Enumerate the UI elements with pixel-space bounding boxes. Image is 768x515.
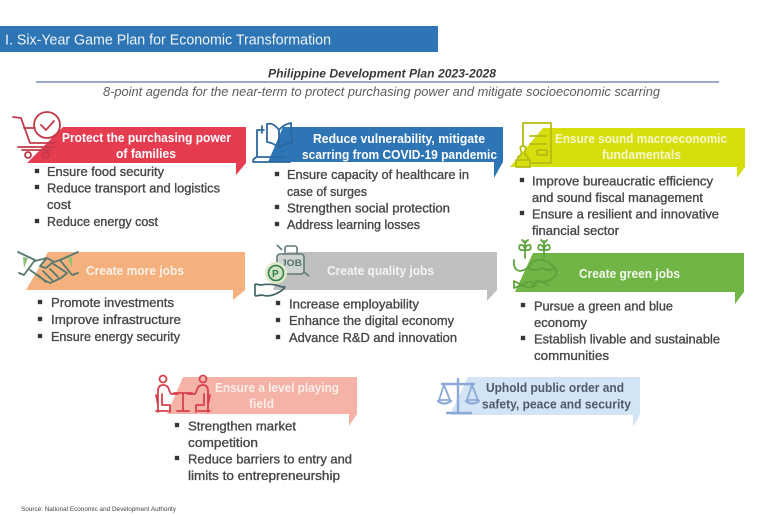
heading <box>555 131 727 162</box>
list <box>276 296 457 345</box>
list: Address learning losses <box>287 217 420 232</box>
subtitle: 8-point agenda for the near-term to protect purchasing power and mitigate socioeconomic scarring <box>103 84 661 99</box>
icon: document with stamp <box>516 123 551 167</box>
list: Ensure food security <box>47 164 164 179</box>
heading: of families <box>116 146 176 161</box>
panel: level playing field <box>156 376 357 483</box>
list: Reduce barriers to entry and <box>188 452 352 466</box>
panel: reduce vulnerability <box>253 123 503 232</box>
heading: Ensure sound macroeconomic <box>555 131 727 146</box>
heading: field <box>249 396 274 411</box>
list <box>175 418 352 483</box>
heading: Create more jobs <box>86 263 184 278</box>
banner: salmon <box>167 377 357 426</box>
icon: plants, whale and fish <box>514 240 556 288</box>
list: Strengthen market <box>188 418 296 434</box>
header bar: I. Six-Year Game Plan for Economic Transformation <box>5 32 331 48</box>
list: Ensure a resilient and innovative <box>532 206 719 222</box>
list <box>35 164 220 229</box>
icon: job case, peso coin and hand <box>255 245 309 296</box>
panel: public order and safety <box>438 377 640 427</box>
heading: fundamentals <box>602 147 681 162</box>
heading: Create quality jobs <box>327 263 434 278</box>
banner: yellow-green <box>510 128 745 178</box>
list: Pursue a green and blue <box>534 298 673 314</box>
panel: sound macroeconomic fundamentals <box>510 123 745 238</box>
icon: scales of justice <box>438 379 479 413</box>
icon: handshake <box>18 252 78 283</box>
list: Increase employability <box>289 296 419 312</box>
header bar <box>0 26 438 52</box>
heading: Create green jobs <box>579 266 680 281</box>
heading: Ensure a level playing <box>215 380 339 395</box>
list: Improve infrastructure <box>51 312 181 327</box>
list: and sound fiscal management <box>532 190 703 205</box>
heading <box>302 131 497 162</box>
list: Ensure energy security <box>51 329 180 344</box>
banner: red <box>27 127 246 175</box>
heading: safety, peace and security <box>482 396 632 412</box>
heading: Reduce vulnerability, mitigate <box>313 131 485 146</box>
list: Improve bureaucratic efficiency <box>532 174 713 188</box>
list: Reduce energy cost <box>47 214 158 229</box>
heading: scarring from COVID-19 pandemic <box>302 147 497 162</box>
panel: create green jobs <box>514 240 744 363</box>
banner: green <box>515 253 744 304</box>
icon: job case, peso coin and hand: JOB <box>281 258 302 269</box>
list: cost <box>47 197 71 212</box>
banner: blue <box>268 127 503 178</box>
list <box>520 174 719 238</box>
heading: Protect the purchasing power <box>62 130 231 145</box>
icon: job case, peso coin and hand: P <box>272 269 279 280</box>
list: Enhance the digital economy <box>289 313 454 328</box>
list: Reduce transport and logistics <box>47 180 220 196</box>
heading <box>62 130 231 161</box>
list: Establish livable and sustainable <box>534 332 720 346</box>
banner: grey <box>273 252 497 301</box>
list: competition <box>188 435 258 450</box>
list: Promote investments <box>51 295 174 310</box>
list <box>521 298 720 363</box>
panel: create quality jobs <box>255 245 497 345</box>
list: case of surges <box>287 184 367 199</box>
list: financial sector <box>532 223 620 238</box>
icon: two people at table <box>156 376 210 412</box>
list: Advance R&D and innovation <box>289 330 457 345</box>
heading: Uphold public order and <box>486 380 624 395</box>
list: Ensure capacity of healthcare in <box>287 167 469 182</box>
heading <box>482 380 632 412</box>
heading <box>215 380 339 411</box>
panel: protect the purchasing power <box>13 112 246 229</box>
list <box>38 295 181 344</box>
list: communities <box>534 348 610 363</box>
panel: create more jobs <box>18 252 245 344</box>
list: economy <box>534 315 588 330</box>
list: Strengthen social protection <box>287 200 450 216</box>
banner: light blue <box>450 377 640 427</box>
icon: laptop with book <box>253 123 292 162</box>
list <box>275 167 469 232</box>
source note: Source: National Economic and Development Authority <box>21 507 176 513</box>
icon: shopping cart with check <box>13 112 60 158</box>
title: Philippine Development Plan 2023-2028 <box>268 66 496 80</box>
banner: orange <box>26 252 245 300</box>
list: limits to entrepreneurship <box>188 468 340 483</box>
